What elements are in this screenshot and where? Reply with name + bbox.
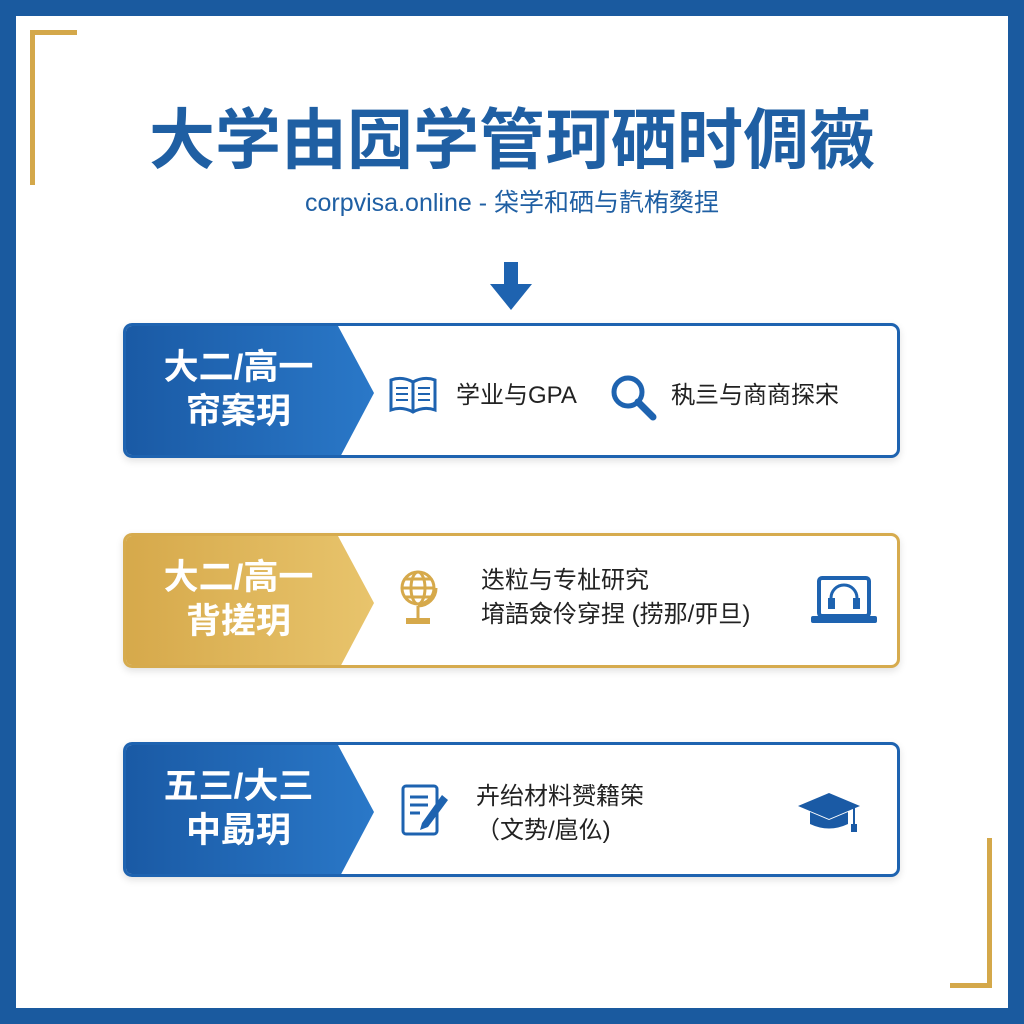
card 1: 秇亖与商商探宋 — [671, 382, 839, 409]
label 3 — [126, 745, 374, 874]
card 3: （文势/扈仫) — [476, 817, 611, 844]
icon document pen — [402, 784, 448, 836]
subtitle: corpvisa.online - 柋学和硒与靔栯奦捏 — [305, 189, 719, 217]
icon magnifier — [612, 376, 656, 420]
title: 大学由囥学管珂硒时倜嶶 — [149, 103, 875, 177]
gold corner bottom-right — [950, 838, 992, 988]
card 1: 学业与GPA — [456, 382, 577, 409]
arrow down — [490, 262, 532, 310]
card 2 — [123, 533, 900, 668]
icon globe — [400, 570, 438, 624]
card 1: 大二/高一 — [164, 348, 313, 387]
card 1: 帘案玥 — [186, 392, 291, 431]
card 2: 大二/高一 — [164, 558, 313, 597]
card 3: 五三/大三 — [164, 767, 313, 806]
card 2: 背搓玥 — [186, 602, 291, 641]
label 2 — [126, 536, 374, 665]
card 1 — [123, 323, 900, 458]
label 1 — [126, 326, 374, 455]
card 3 — [123, 742, 900, 877]
gold corner top-left — [30, 30, 77, 185]
icon book — [390, 376, 436, 414]
card 2: 堉語僉伶穿捏 (捞那/丣旦) — [481, 601, 750, 628]
icon graduation cap — [798, 793, 860, 832]
card 3: 中勗玥 — [186, 811, 291, 850]
card 2: 迭粒与专杫研究 — [481, 567, 649, 594]
icon laptop headset — [811, 576, 877, 623]
card 3: 卉绐材料赟籍筞 — [476, 783, 644, 810]
